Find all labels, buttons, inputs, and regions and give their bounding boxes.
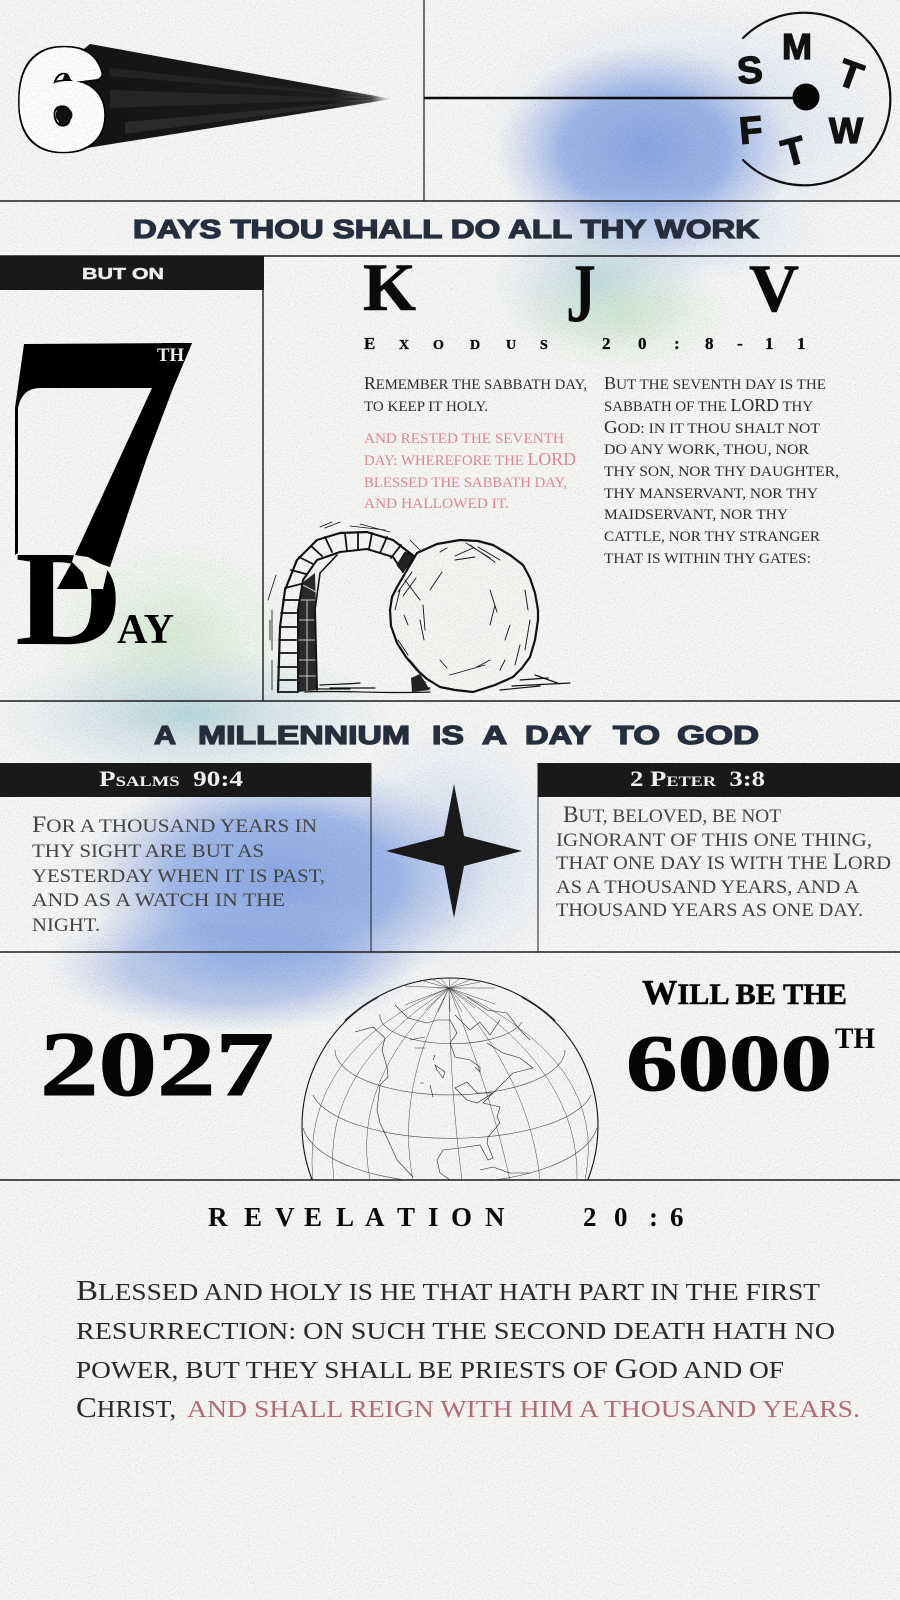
ground shading — [305, 675, 570, 693]
parallels — [303, 1014, 597, 1183]
numeral seven — [15, 343, 192, 567]
banner: but on — [0, 256, 264, 290]
pole spokes — [405, 978, 495, 1012]
numeral six: 6 — [20, 26, 103, 173]
verse left in red: BLESSED THE SABBATH DAY, — [364, 475, 567, 491]
header bar — [538, 763, 900, 797]
section divider lines — [0, 0, 900, 1180]
verse left: TO KEEP IT HOLY. — [364, 399, 488, 415]
verse: revelation text: CHRIST, — [76, 1392, 176, 1424]
weekday letters: T — [777, 129, 811, 176]
ordinal th: TH — [835, 1022, 875, 1055]
panel: 2 peter 3:8 — [538, 763, 900, 921]
numeral seven: 7 — [9, 266, 225, 650]
reference: exodus 20:8-11: E XODUS 20:8-11 — [364, 334, 806, 353]
heading: a millennium is a day to god: A — [482, 720, 507, 750]
verse: revelation text: RESURRECTION: ON SUCH THE SECOND DEATH HATH NO — [76, 1319, 835, 1345]
banner: but on: BUT ON — [82, 266, 164, 283]
verse left in red — [364, 431, 576, 512]
week dial — [424, 13, 890, 185]
verse text: AND AS A WATCH IN THE — [32, 890, 285, 911]
red verse ending: AND SHALL REIGN WITH HIM A THOUSAND YEARS. — [187, 1397, 860, 1423]
verse text: BUT, BELOVED, BE NOT — [563, 802, 781, 827]
weekday letters: S — [735, 49, 764, 93]
verse text: THAT ONE DAY IS WITH THE LORD — [556, 849, 891, 874]
weekday letters: M — [782, 26, 812, 67]
verse text — [556, 802, 891, 921]
verse text: THOUSAND YEARS AS ONE DAY. — [556, 900, 863, 921]
heading: a millennium is a day to god: IS — [432, 720, 464, 750]
north america coastline — [355, 997, 533, 1180]
verse right: THY MANSERVANT, NOR THY — [604, 486, 818, 502]
verse right: THAT IS WITHIN THY GATES: — [604, 551, 811, 567]
meridians — [312, 988, 588, 1180]
globe illustration — [301, 978, 599, 1180]
heading: a millennium is a day to god: TO — [613, 720, 660, 750]
verse right: DO ANY WORK, THOU, NOR — [604, 442, 809, 458]
globe outline — [301, 978, 599, 1180]
weekday letters: T — [832, 52, 868, 99]
verse text: THY SIGHT ARE BUT AS — [32, 841, 264, 862]
title: KJV: V — [749, 250, 799, 326]
verse right: GOD: IN IT THOU SHALT NOT — [604, 417, 820, 437]
verse left in red: AND HALLOWED IT. — [364, 496, 509, 512]
header bar: Psalms 90:4 — [99, 766, 243, 791]
weekday letters: W — [829, 110, 863, 151]
header bar — [0, 763, 371, 797]
will be the 6000th — [626, 973, 875, 1108]
verse right: SABBATH OF THE LORD THY — [604, 395, 813, 415]
weekday letters — [735, 26, 868, 176]
illustration: tomb and stone — [268, 522, 570, 693]
verse: revelation text: BLESSED AND HOLY IS HE THAT HATH PART IN THE FIRST — [76, 1275, 820, 1307]
verse right: BUT THE SEVENTH DAY IS THE — [604, 373, 826, 393]
word day: AY — [117, 607, 174, 653]
title: KJV: K — [363, 249, 416, 325]
rim shading — [345, 997, 555, 1021]
heading: a millennium is a day to god: A — [154, 720, 176, 750]
verse: revelation text: POWER, BUT THEY SHALL BE PRIESTS OF GOD AND OF — [76, 1353, 784, 1385]
number six with comet tail — [20, 26, 392, 173]
panel: psalms 90:4 — [0, 763, 371, 936]
verse text: AS A THOUSAND YEARS, AND A — [556, 877, 859, 898]
icon: four-point star — [386, 784, 522, 918]
verse text: YESTERDAY WHEN IT IS PAST, — [32, 866, 325, 887]
word day: D — [15, 524, 123, 674]
heading: a millennium is a day to god: DAY — [525, 720, 591, 750]
comet tail — [55, 44, 392, 148]
verse left in red: AND RESTED THE SEVENTH — [364, 431, 564, 447]
ordinal th: TH — [157, 345, 184, 366]
boulder — [390, 540, 538, 692]
title: KJV — [363, 247, 799, 340]
header bar: 2 Peter 3:8 — [630, 766, 765, 791]
panel: kjv exodus — [363, 247, 839, 567]
verse left: REMEMBER THE SABBATH DAY, — [364, 373, 587, 393]
verse right — [604, 373, 839, 567]
verse right: THY SON, NOR THY DAUGHTER, — [604, 464, 839, 480]
title: KJV: J — [566, 247, 596, 340]
heading: days thou shall do all thy work: DAYS THOU SHALL DO ALL THY WORK — [133, 214, 759, 244]
panel: seventh day — [0, 256, 264, 674]
dial arc — [743, 13, 890, 185]
weekday letters: F — [738, 109, 764, 153]
arch stonework — [268, 522, 420, 692]
verse right: CATTLE, NOR THY STRANGER — [604, 529, 820, 545]
word day — [15, 524, 174, 674]
heading: a millennium is a day to god: GOD — [677, 720, 759, 750]
verse left — [364, 373, 587, 415]
timeline line — [424, 97, 806, 99]
verse text: IGNORANT OF THIS ONE THING, — [556, 830, 872, 851]
6000: 6000 — [626, 1020, 832, 1108]
verse text: FOR A THOUSAND YEARS IN — [32, 812, 317, 837]
heading: a millennium is a day to god — [154, 720, 759, 750]
gradient glow backdrop — [0, 0, 900, 1033]
verse: revelation text — [76, 1275, 860, 1424]
heading: a millennium is a day to god: MILLENNIUM — [198, 720, 410, 750]
six counter — [56, 108, 72, 122]
dial dot — [792, 84, 820, 110]
verse left in red: DAY: WHEREFORE THE LORD — [364, 449, 576, 469]
verse text: NIGHT. — [32, 915, 100, 936]
verse right: MAIDSERVANT, NOR THY — [604, 507, 788, 523]
verse text — [32, 812, 325, 936]
year 2027: 2027 — [40, 1013, 274, 1115]
will be the: WILL BE THE — [642, 973, 847, 1012]
heading: revelation 20:6: REVELATION20:6 — [208, 1202, 684, 1232]
